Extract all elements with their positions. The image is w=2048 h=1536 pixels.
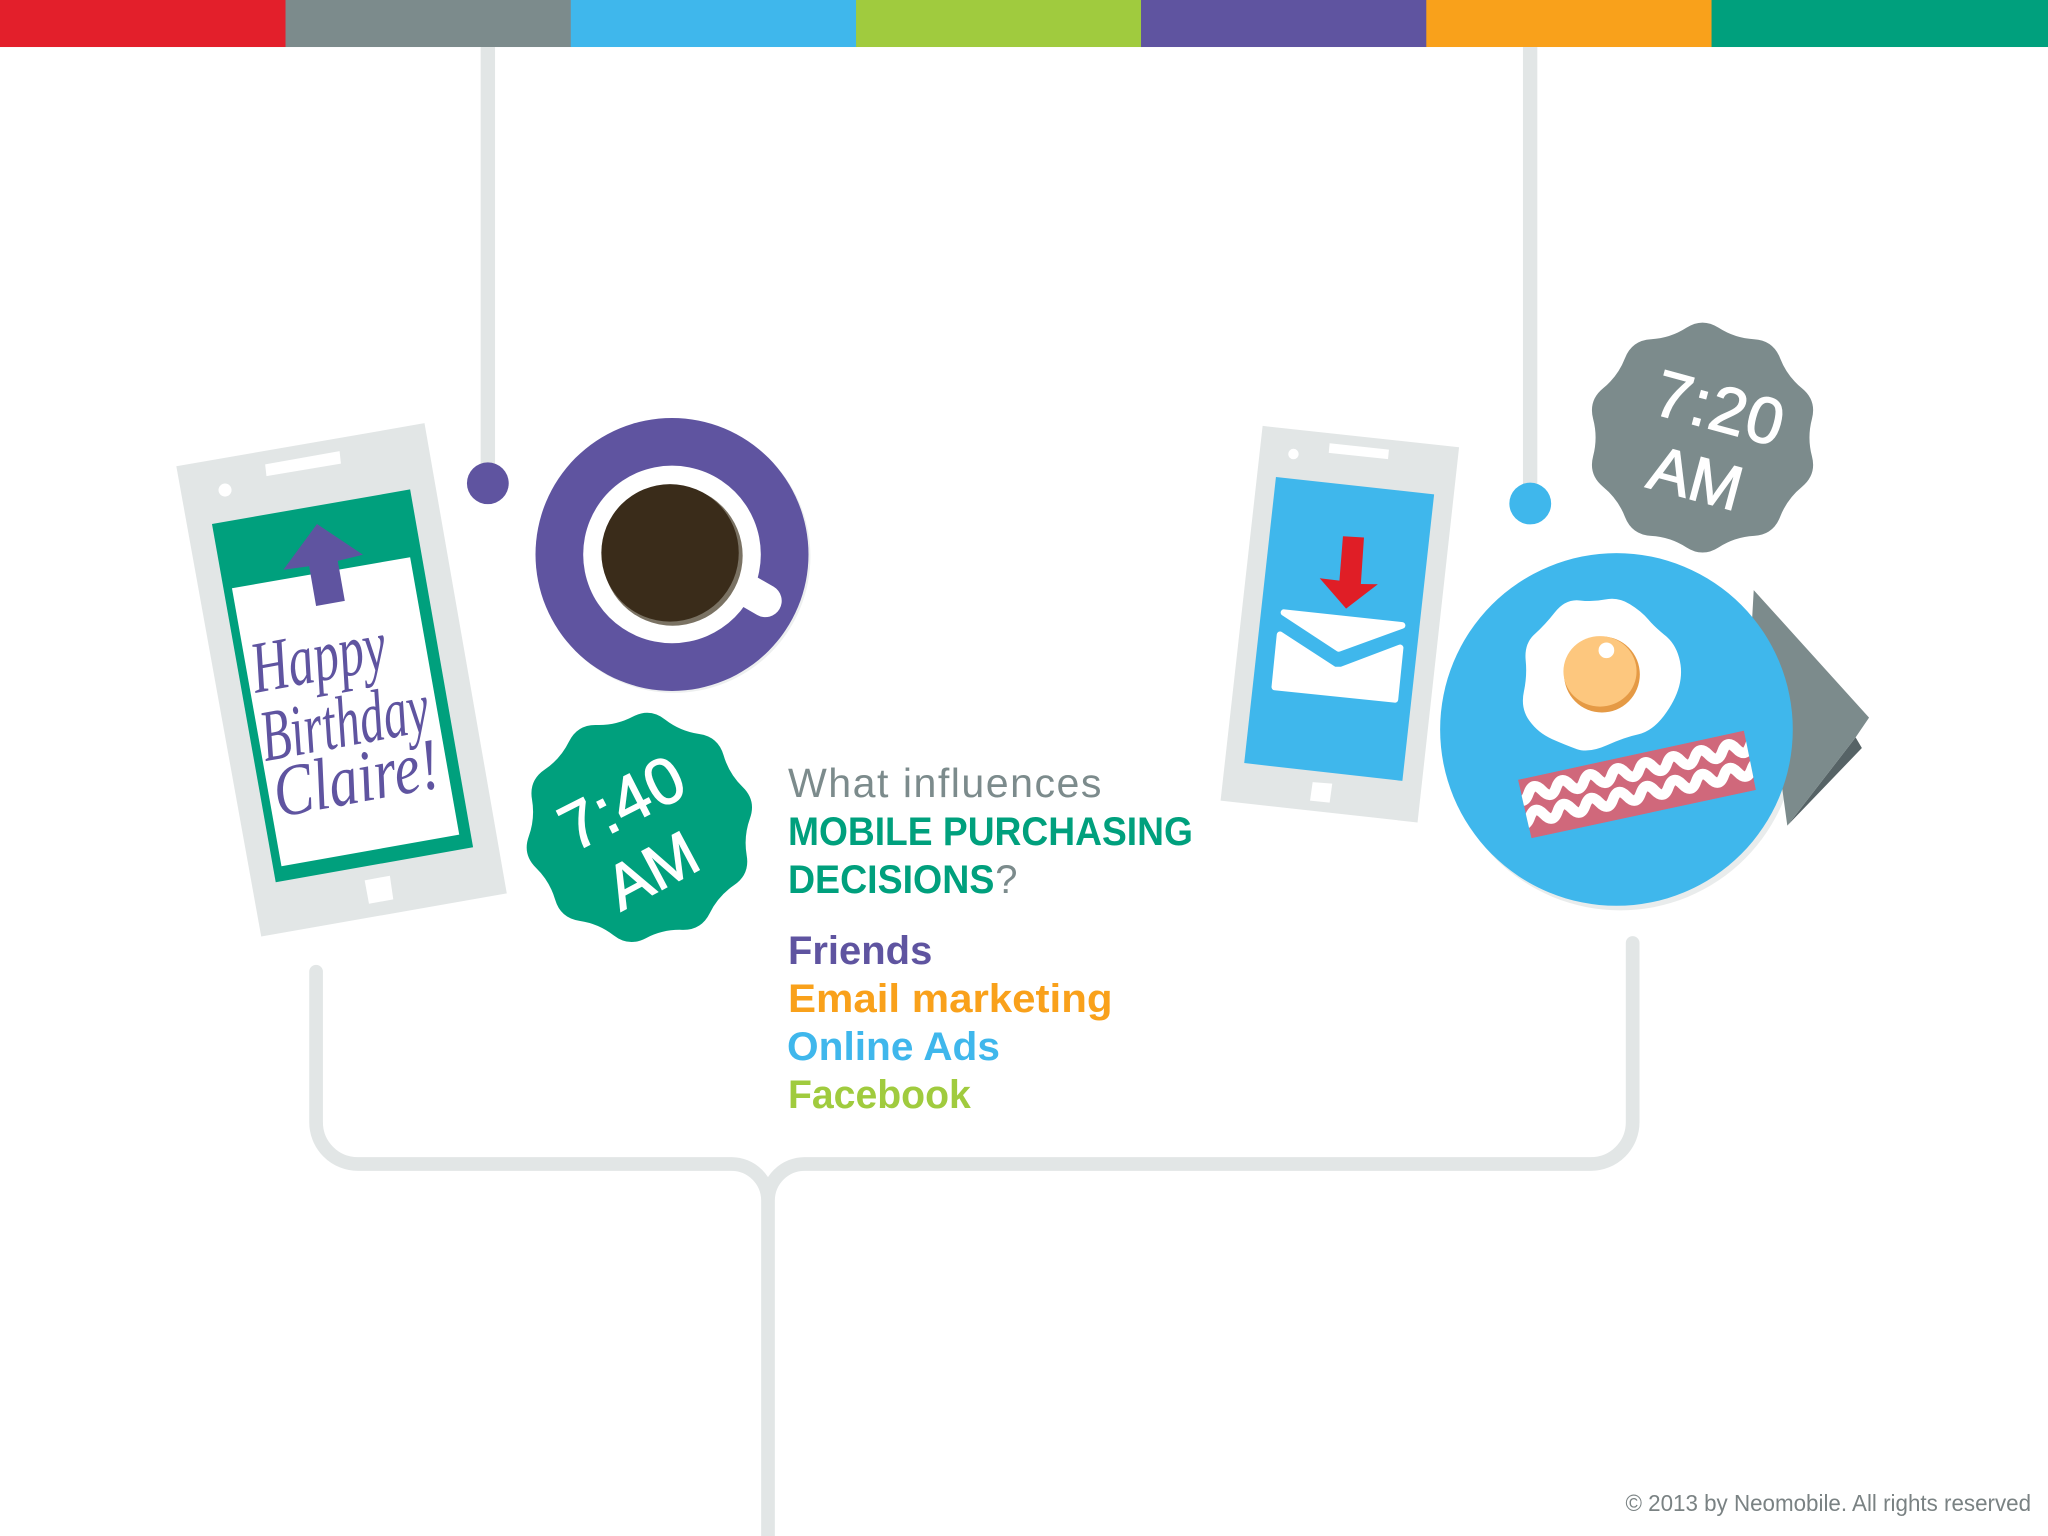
icon: envelope — [1275, 613, 1402, 699]
influences list — [787, 929, 1113, 1117]
bracket connector — [316, 943, 1633, 1536]
headline text — [788, 760, 1193, 902]
influences list: Email marketing — [788, 977, 1113, 1021]
headline text: DECISIONS — [788, 858, 994, 902]
bacon strip — [1518, 730, 1756, 838]
timeline connector: left — [467, 47, 509, 504]
badge: 7:40 AM: 7:40 — [547, 741, 697, 865]
influences list: Friends — [788, 929, 932, 973]
badge: 7:40 AM — [502, 694, 776, 961]
birthday greeting text: Happy — [243, 604, 393, 709]
badge: 7:40 AM: AM — [594, 818, 710, 924]
badge: 7:20 AM: 7:20 — [1647, 356, 1792, 460]
plate shadow — [1444, 558, 1797, 910]
birthday greeting text: Claire! — [266, 723, 446, 833]
icon: red down arrow — [1320, 536, 1378, 609]
birthday greeting text — [243, 604, 446, 833]
copyright: © 2013 by Neomobile. All rights reserved — [1625, 1490, 2031, 1516]
icon: breakfast plate with egg and bacon — [1440, 553, 1812, 906]
fried egg — [1525, 601, 1679, 749]
icon: coffee cup on saucer — [536, 418, 810, 693]
timeline connector: right — [1509, 47, 1551, 524]
badge: 7:20 AM: AM — [1641, 433, 1750, 525]
badge: 7:20 AM — [1559, 297, 1846, 578]
headline text: MOBILE PURCHASING — [788, 810, 1193, 854]
icon: folded napkin — [1750, 590, 1869, 826]
icon: purple up arrow — [283, 524, 363, 606]
influences list: Facebook — [788, 1073, 972, 1117]
phone: birthday message — [176, 423, 507, 936]
colour bar — [0, 0, 2048, 47]
influences list: Online Ads — [787, 1025, 1000, 1069]
phone: email download — [1221, 426, 1459, 822]
headline text: ? — [995, 858, 1017, 902]
birthday greeting text: Birthday — [253, 666, 435, 777]
headline text: What influences — [788, 760, 1101, 806]
